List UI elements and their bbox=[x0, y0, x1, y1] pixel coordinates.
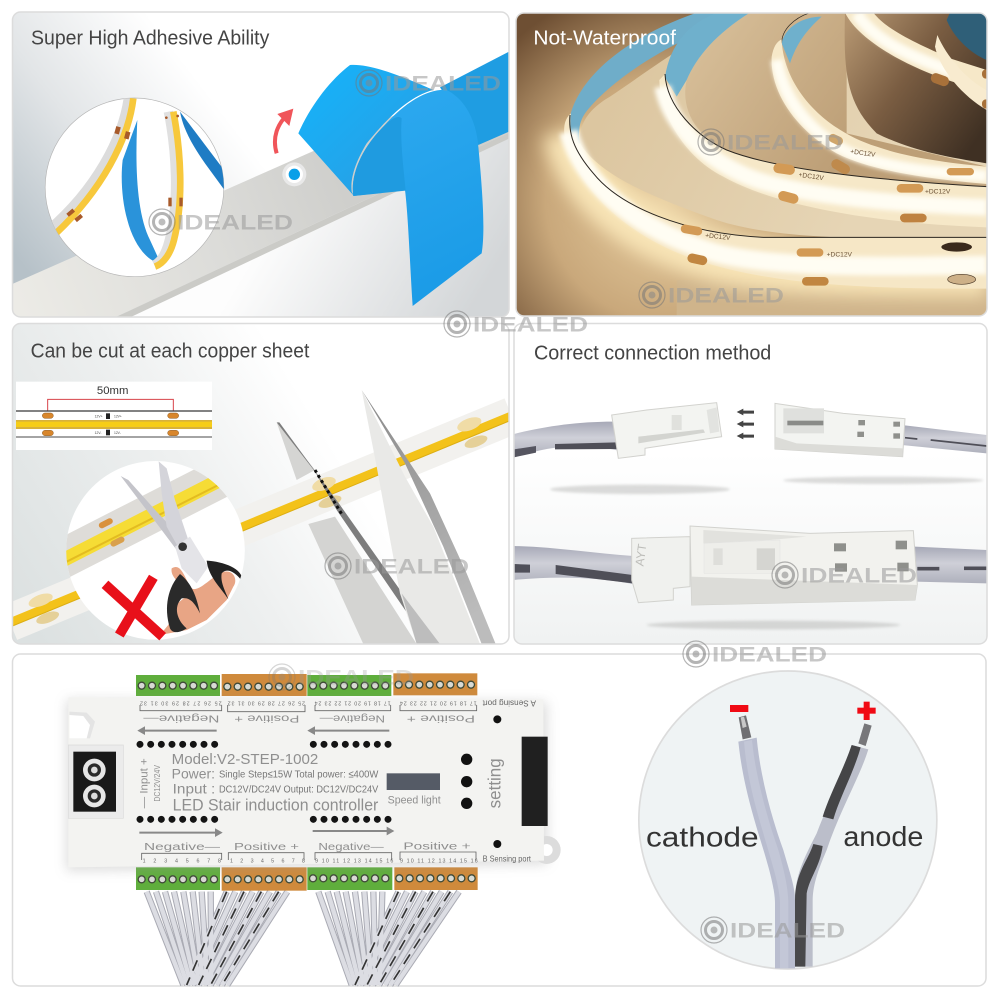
controller label text: — Input + bbox=[138, 758, 150, 808]
glowing LED strip coils photo bbox=[516, 13, 992, 317]
strip printed labels: +DC12V bbox=[925, 188, 951, 195]
watermark bbox=[639, 282, 784, 308]
watermark bbox=[149, 209, 293, 235]
controller label text: DC12V/DC24V Output: DC12V/DC24V bbox=[219, 784, 378, 795]
dot rows bbox=[140, 744, 388, 819]
icon: plus sign bbox=[857, 702, 876, 720]
bottom row numbers: 1 2 3 4 5 6 7 8 bbox=[230, 859, 305, 865]
terminal blocks bbox=[136, 673, 478, 891]
anode label: anode bbox=[843, 821, 923, 852]
watermark bbox=[701, 917, 845, 943]
bottom row labels: Negative— bbox=[144, 842, 220, 853]
sensing port labels: B Sensing port bbox=[483, 853, 531, 863]
controller body bbox=[67, 697, 561, 871]
watermark: IDEALED bbox=[473, 314, 588, 336]
inset circle: scissors cutting wrong place bbox=[57, 461, 245, 640]
panel: Can be cut at each copper sheet bbox=[10, 323, 512, 644]
controller label text bbox=[138, 699, 536, 865]
icon: minus sign bbox=[730, 705, 748, 712]
buttons bbox=[461, 715, 501, 848]
strip printed labels: +DC12V bbox=[798, 172, 825, 182]
controller label text: DC12V/24V bbox=[152, 765, 162, 802]
outer strip bbox=[564, 113, 987, 289]
panel title: Can be cut at each copper sheet bbox=[31, 340, 310, 362]
panel: Super High Adhesive Ability bbox=[12, 12, 509, 317]
top left connector bbox=[612, 403, 722, 458]
strip printed labels: +DC12V bbox=[827, 252, 853, 259]
controller label text: Model:V2-STEP-1002 bbox=[172, 751, 318, 768]
top row labels upside down: Positive + bbox=[406, 712, 475, 723]
dotted cut line bbox=[315, 470, 342, 514]
watermark bbox=[444, 311, 588, 337]
sensing port labels bbox=[482, 699, 536, 863]
connector photos bbox=[514, 402, 986, 643]
copper pads bbox=[680, 69, 992, 286]
top left wire bbox=[514, 422, 616, 452]
icon: blue dot marker bbox=[282, 162, 306, 186]
watermark: IDEALED bbox=[801, 564, 917, 588]
watermark: IDEALED bbox=[727, 132, 843, 154]
inset circle: cathode and anode wires bbox=[639, 671, 937, 969]
panel: Correct connection method bbox=[514, 323, 987, 644]
third coil backing tape bbox=[782, 17, 822, 63]
second strip bbox=[659, 74, 987, 227]
connector photos: AYT bbox=[632, 542, 650, 567]
strip diagram: 50mm spacing: 50mm bbox=[97, 385, 128, 397]
watermark: IDEALED bbox=[712, 644, 827, 666]
top row labels upside down bbox=[143, 712, 475, 723]
strip printed labels: +DC12V bbox=[705, 232, 731, 242]
watermark bbox=[356, 70, 501, 96]
centre shadow bbox=[845, 13, 987, 163]
panel background bbox=[12, 12, 509, 317]
watermark: IDEALED bbox=[385, 72, 501, 96]
cathode wire bbox=[738, 715, 795, 968]
strip diagram: 50mm spacing: 12V+ bbox=[95, 414, 103, 418]
strip diagram: 50mm spacing: 12V+ bbox=[114, 414, 122, 418]
anode wire bbox=[795, 723, 872, 967]
bottom row labels: Negative— bbox=[318, 842, 384, 853]
top row labels upside down: Negative— bbox=[320, 712, 385, 723]
strip printed labels bbox=[705, 148, 951, 259]
sensing port labels: A Sensing port bbox=[482, 699, 536, 709]
outer backing tape bbox=[570, 14, 714, 144]
adhesive strip bbox=[13, 116, 508, 316]
output wires bbox=[147, 892, 459, 985]
controller label text: Speed light bbox=[388, 794, 441, 806]
strip diagram: 50mm spacing bbox=[16, 382, 212, 450]
top row labels upside down: Positive + bbox=[234, 712, 299, 723]
bottom row labels: Positive + bbox=[403, 841, 471, 852]
arrow: peel direction bbox=[275, 109, 293, 153]
scissor blades bbox=[277, 390, 496, 644]
watermark: IDEALED bbox=[177, 212, 293, 234]
top row numbers upside down: 17 18 19 20 21 22 23 24 bbox=[315, 700, 391, 706]
fourth and fifth strips bbox=[845, 13, 987, 90]
strip diagram: 50mm spacing: 12V- bbox=[114, 431, 121, 435]
third strip bbox=[772, 39, 987, 184]
watermark: IDEALED bbox=[354, 556, 469, 578]
watermark bbox=[698, 129, 843, 155]
cutting scene bbox=[10, 323, 512, 644]
bottom row numbers: 9 10 11 12 13 14 15 16 bbox=[400, 859, 478, 865]
bracket lines bbox=[140, 705, 477, 860]
LED strip band bbox=[10, 416, 512, 623]
outer strip halo bbox=[567, 132, 987, 272]
copper pads bbox=[27, 414, 489, 626]
top row labels upside down: Negative— bbox=[143, 712, 219, 723]
panel: Not-Waterproof bbox=[516, 13, 992, 317]
watermark bbox=[772, 562, 917, 588]
top right connector bbox=[775, 403, 905, 457]
controller label text: Single Step≤15W Total power: ≤400W bbox=[219, 769, 379, 780]
panel title: Correct connection method bbox=[534, 342, 771, 364]
top right wire bbox=[902, 425, 987, 453]
watermark bbox=[325, 553, 469, 579]
bottom row numbers: 9 10 11 12 13 14 15 16 bbox=[315, 859, 393, 865]
controller label text: Power: bbox=[172, 765, 215, 781]
watermark: IDEALED bbox=[730, 920, 845, 942]
bottom row numbers: 1 2 3 4 5 6 7 8 bbox=[143, 859, 221, 865]
stair induction controller bbox=[67, 673, 561, 985]
flow arrows bbox=[139, 728, 392, 835]
bottom wires bbox=[514, 546, 633, 584]
blue release tape bbox=[298, 52, 509, 306]
icon: red cross bbox=[105, 577, 163, 637]
controller label text: LED Stair induction controller bbox=[173, 796, 379, 815]
bottom row numbers bbox=[143, 859, 478, 865]
strip diagram: 50mm spacing: 12V- bbox=[95, 431, 102, 435]
bottom row labels bbox=[144, 841, 471, 853]
watermark: IDEALED bbox=[298, 666, 414, 690]
watermark bbox=[269, 664, 414, 690]
panel title: Super High Adhesive Ability bbox=[31, 28, 269, 50]
top row numbers upside down: 25 26 27 28 29 30 31 32 bbox=[228, 700, 305, 706]
panel title: Not-Waterproof bbox=[533, 28, 676, 50]
top row numbers upside down: 17 18 19 20 21 22 23 24 bbox=[400, 700, 477, 706]
second coil backing tape bbox=[665, 13, 750, 97]
floor shadows bbox=[550, 477, 983, 629]
arrows: insertion direction bbox=[737, 409, 754, 439]
inset circle: tape close-up bbox=[45, 98, 224, 277]
bottom row labels: Positive + bbox=[234, 842, 299, 853]
top row numbers upside down: 25 26 27 28 29 30 31 32 bbox=[140, 700, 222, 706]
dark copper dots bbox=[941, 242, 976, 284]
controller label text: Input : bbox=[173, 780, 215, 796]
controller label text: setting bbox=[485, 758, 505, 808]
watermark: IDEALED bbox=[668, 284, 784, 308]
panel: stair controller and wiring bbox=[67, 671, 937, 985]
strip printed labels: +DC12V bbox=[850, 148, 876, 159]
cathode label: cathode bbox=[646, 822, 759, 853]
watermark bbox=[683, 641, 827, 667]
top row numbers upside down bbox=[140, 700, 477, 706]
joined connector bbox=[632, 537, 690, 603]
